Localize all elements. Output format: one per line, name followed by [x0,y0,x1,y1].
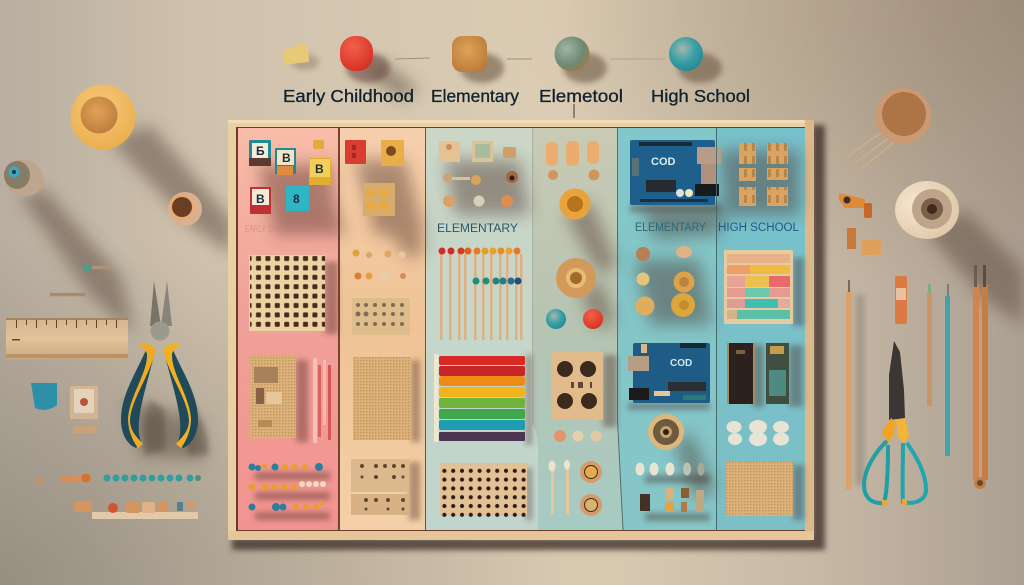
icon: orange clips [839,193,881,255]
icon: wooden beads [636,246,695,317]
panel: sage [533,128,623,530]
long wall shadows [20,60,1024,460]
frame shadow [232,125,825,550]
icon: bead board [352,298,410,335]
icon: letter blocks: B [282,151,291,165]
icon: beads [554,430,602,442]
icon: tan rounded button [452,36,504,83]
icon: parts rows [443,171,518,207]
icon: small boards [351,459,409,515]
panel: mint elementary [426,128,539,530]
panel: blue high school [717,128,805,530]
icon: wooden stick [846,280,864,490]
stage headings [283,86,750,106]
icon: orange tube [895,276,907,324]
icon: spool [648,414,684,450]
panel shadows [258,150,800,500]
icon: yellow knob [70,84,136,150]
icon: letter blocks: B [315,162,324,176]
board frame [228,120,814,540]
icon: woven pad [726,462,793,516]
icon: color tile board [724,250,793,324]
icon: letter blocks: Б [256,144,265,158]
icon: pencils [927,284,950,456]
top row of objects [283,36,722,118]
icon: pliers [121,281,208,455]
icon: scissors [864,341,926,505]
icon: arduino board top [630,140,721,205]
icon: letter blocks: B [256,192,265,206]
icon: eye bead [0,153,50,203]
icon: small components [640,488,704,512]
panel: aqua [600,128,716,530]
icon: wood pieces [739,143,788,206]
right side tools [839,88,988,505]
early childhood items [245,140,331,511]
icon: beige chunk [283,43,319,70]
icon: pink sticks [313,358,331,443]
icon: woven board [353,357,411,440]
panel label: elementary: ELEMENTARY [635,222,706,234]
icon: letter blocks [249,140,331,214]
icon: four-hole plate [551,352,603,420]
icon: pegboard grid [249,255,325,331]
icon: clear blobs [726,420,789,446]
peach panel items [345,140,411,515]
icon: ruler [6,318,128,359]
heading: elemetool: Elemetool [539,86,623,106]
icon: amber ring [560,188,590,220]
icon: sticks [548,460,570,515]
faint panel label: EARLY CHILDHOOD [245,224,307,235]
elementary panel items [434,141,529,517]
icon: picture blocks [439,141,516,162]
icon: teal ball [669,37,722,83]
icon: orange lumps [546,141,600,180]
icon: arduino board bottom [628,343,710,403]
panel: peach [340,128,425,530]
panel: pink early childhood [238,128,338,530]
heading: early childhood: Early Childhood [283,86,414,106]
icon: green-brown ball [554,36,607,83]
icon: double sticks [973,265,988,489]
icon: small beads [352,250,406,280]
icon: rainbow bars [434,354,525,442]
icon: LEDs [636,462,704,476]
icon: arduino board top: COD [651,156,676,168]
heading: elementary: Elementary [431,86,519,106]
icon: picture board [250,355,296,438]
icon: colored pins [248,463,326,511]
icon: four-dot block [363,183,395,216]
icon: bead pins [438,248,522,340]
icon: perforated board [440,463,529,517]
panel label: elementary: ELEMENTARY [437,223,518,235]
icon: red block [345,140,366,164]
icon: red ball [340,36,390,83]
panel label: high school: HIGH SCHOOL [718,222,800,234]
icon: arduino board bottom: COD [670,358,692,369]
icon: wooden gear [556,258,596,298]
faint wall marks [50,264,110,296]
left side tools [0,84,208,519]
sage panel items [546,141,603,516]
icon: cream spool [895,181,959,239]
high school panel items [718,143,800,516]
icon: bead strips [38,474,201,519]
panel dividers [339,128,716,530]
aqua panel items [628,140,721,512]
heading: high school: High School [651,86,750,106]
icon: yellow block with hole [381,140,404,166]
icon: teal and red balls [546,309,603,329]
icon: small cup [168,192,202,226]
icon: chips [727,343,789,404]
icon: round gauge with legs [845,88,931,170]
icon: letter blocks: 8 [293,192,300,206]
icon: rings [580,461,602,516]
icon: teal block and picture card [31,383,98,433]
